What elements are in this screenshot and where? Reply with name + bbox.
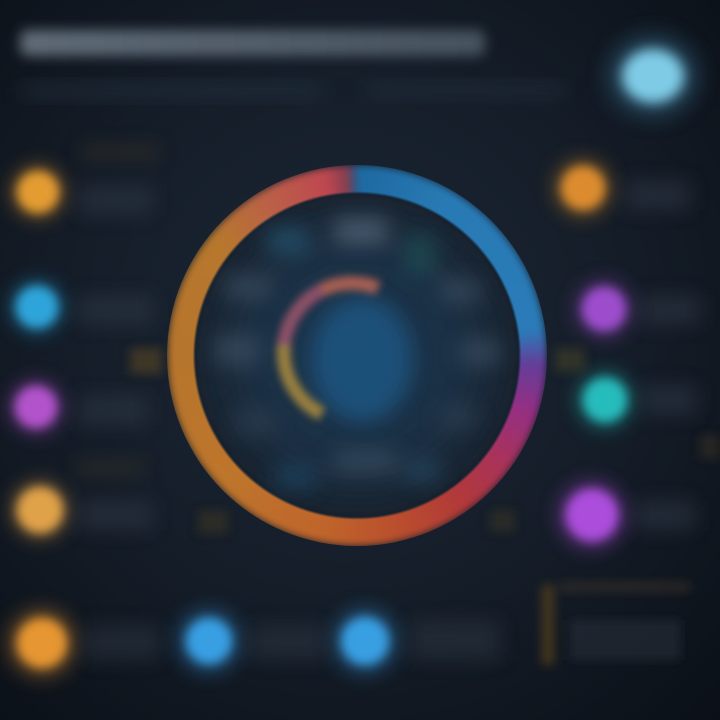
central disc (189, 187, 525, 523)
icon: purple dot right (557, 480, 627, 550)
inner core (312, 298, 412, 422)
icon: purple dot (8, 379, 64, 435)
bottom row (7, 607, 500, 678)
subtitle (22, 84, 565, 98)
icon: blue dot bottom 2 (331, 607, 399, 675)
legend right (553, 158, 700, 550)
right labels (625, 180, 700, 530)
title (20, 30, 485, 56)
icon: teal dot right (575, 370, 635, 430)
icon: blue dot (9, 279, 65, 335)
outer ring (167, 165, 547, 546)
icon: amber dot (10, 480, 70, 540)
icon: blue dot bottom (176, 608, 242, 674)
segment labels inside ring (215, 218, 500, 489)
icon: orange dot right (553, 158, 613, 218)
callout panel bottom right (542, 583, 690, 665)
icon: orange dot bottom (7, 608, 77, 678)
bottom labels (85, 620, 500, 660)
legend left (8, 146, 160, 540)
chart: inner details (189, 187, 525, 523)
inner ring (284, 283, 378, 414)
left labels (75, 146, 160, 530)
icon: orange dot (10, 164, 66, 220)
small accent labels around ring (130, 348, 720, 534)
icon: violet dot right (574, 279, 634, 339)
icon: top right badge (607, 34, 699, 118)
